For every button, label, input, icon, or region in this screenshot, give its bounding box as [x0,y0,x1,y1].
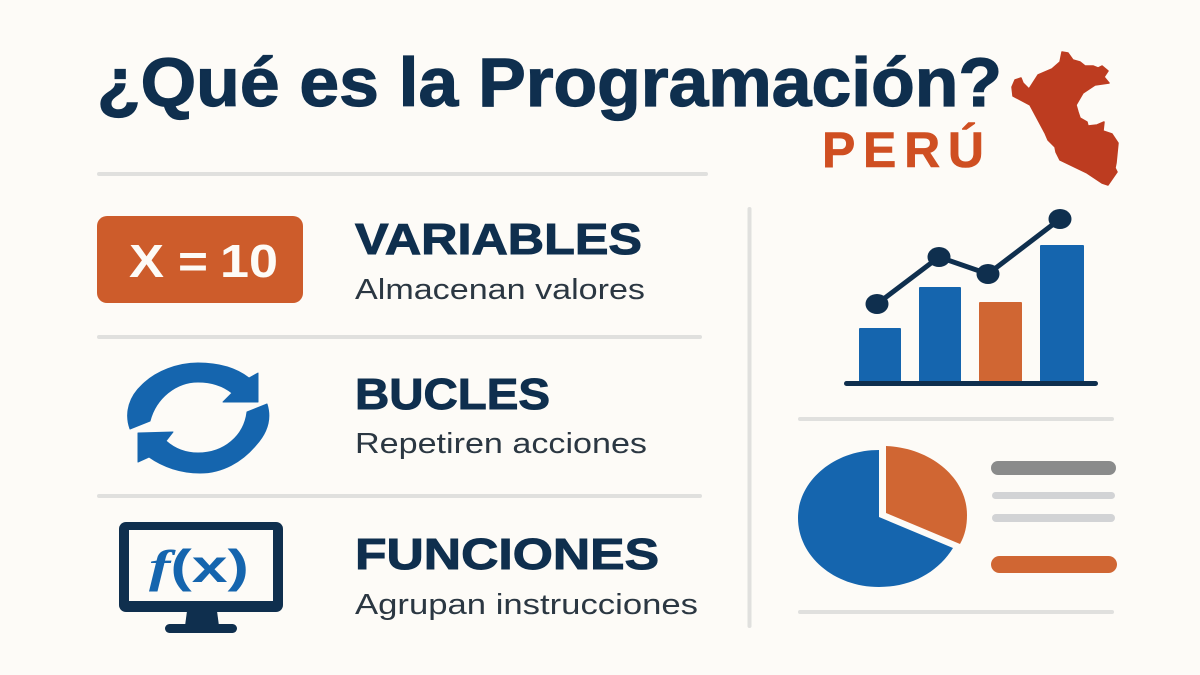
panel: functions [119,522,698,633]
panel: loops [128,363,647,473]
text: variables description: Almacenan valores [355,274,645,306]
text: functions description: Agrupan instrucciones [355,589,698,621]
chart: pie [798,446,967,587]
heading: loops: BUCLES [355,370,550,419]
chart: bars with trend line [844,209,1098,386]
icon: monitor with f(x) [119,522,283,633]
icon: map of Peru [1012,52,1118,185]
heading: functions: FUNCIONES [355,530,659,579]
subtitle: country: PERÚ [822,122,984,178]
icon: circular arrows [128,363,269,473]
icon: monitor with f(x): f(x) [149,540,249,592]
icon: variable badge [97,216,303,303]
icon: variable badge: X [129,235,164,287]
panel: variables [97,215,645,306]
icon: variable badge: = [178,235,208,287]
text: loops description: Repetiren acciones [355,428,647,460]
legend: pie chart bars [991,461,1117,573]
heading: variables: VARIABLES [355,215,642,264]
icon: variable badge: 10 [220,235,278,287]
title: ¿Qué es la Programación? [97,44,1002,121]
